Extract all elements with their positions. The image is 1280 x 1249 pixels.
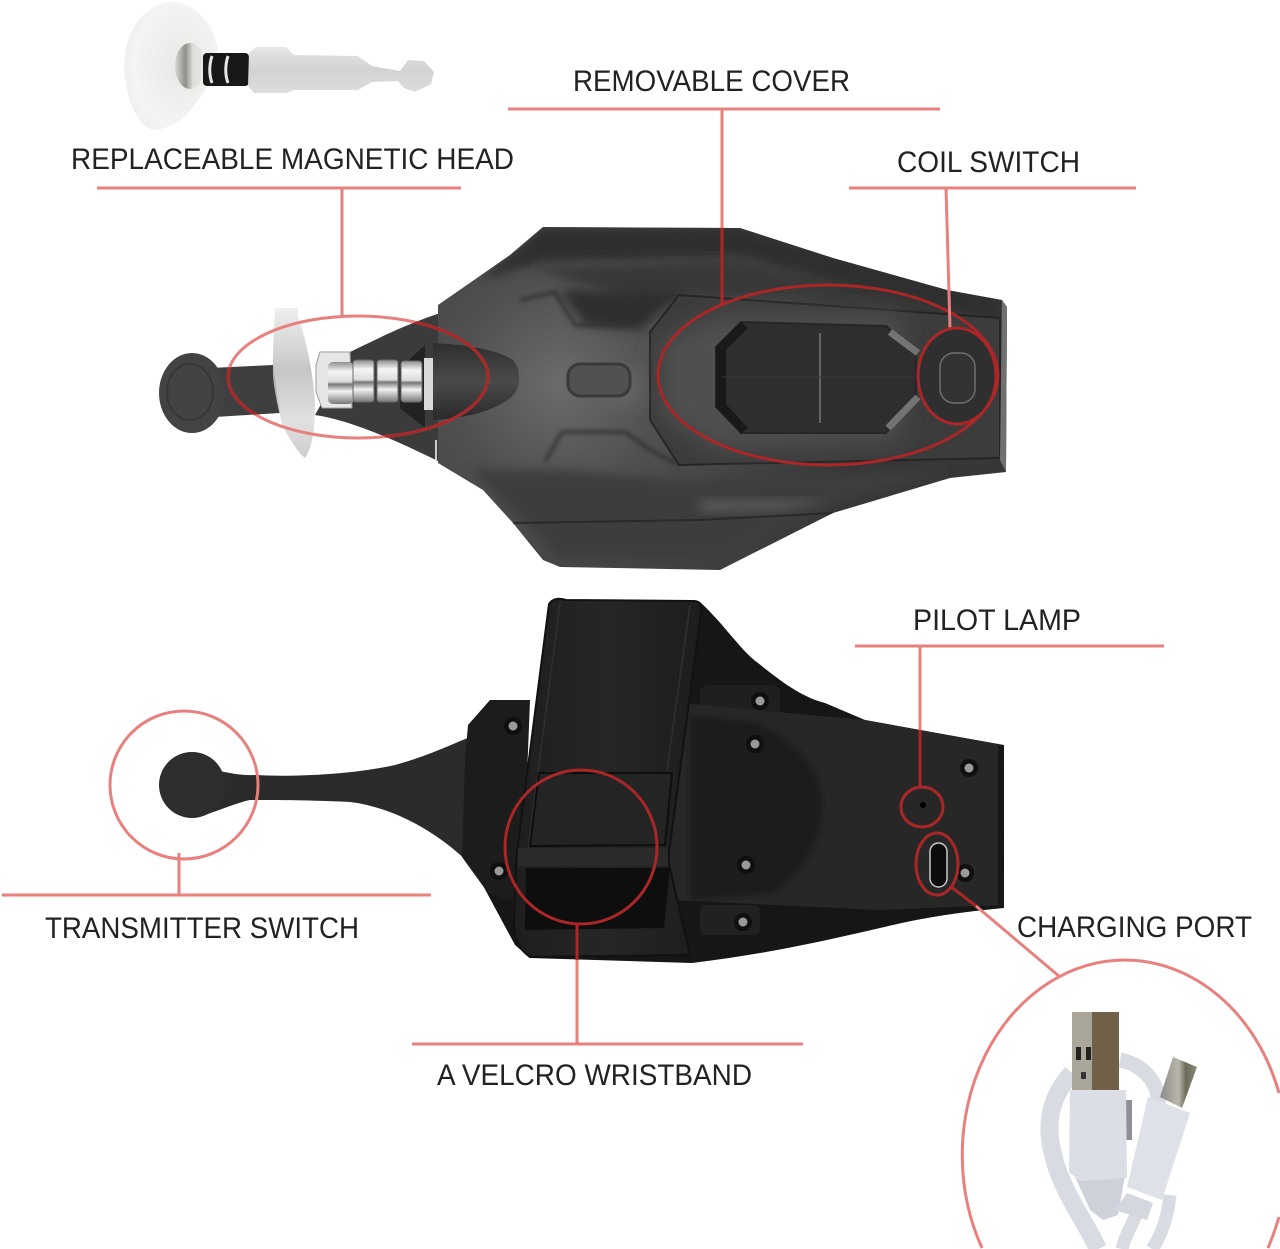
label: pilot lamp: PILOT LAMP — [913, 604, 1081, 637]
end cap edge — [1000, 300, 1007, 472]
callout: transmitter switch — [2, 711, 431, 895]
label: transmitter switch: TRANSMITTER SWITCH — [45, 912, 359, 945]
type-c port — [930, 843, 947, 887]
body shading — [470, 227, 1000, 560]
velcro flap — [530, 773, 672, 846]
lower device, back view — [159, 599, 1004, 963]
upper device, top view — [159, 227, 1007, 570]
front band — [514, 599, 701, 957]
suction cup — [124, 2, 218, 130]
rear mounts — [700, 685, 780, 715]
socket cylinder — [433, 343, 519, 420]
micro usb metal — [1160, 1057, 1197, 1108]
silver ring — [316, 352, 352, 408]
suction cup, side view — [273, 308, 315, 458]
rear strap — [480, 602, 1004, 963]
transmitter arm — [205, 735, 480, 875]
usb-a metal shell — [1072, 1012, 1119, 1090]
label: replaceable magnetic head: REPLACEABLE MAGNETIC HEAD — [71, 143, 514, 176]
transmitter knob — [159, 353, 225, 433]
transmitter stem — [210, 365, 280, 417]
cable loops and bundle — [1049, 1060, 1170, 1249]
center slot — [568, 364, 630, 396]
screws — [490, 692, 978, 931]
callout: charging port — [916, 833, 1279, 1248]
dark circular shade — [690, 715, 822, 900]
micro usb sleeve — [1127, 1097, 1190, 1200]
transmitter knob — [159, 752, 225, 818]
USB cable photo — [1049, 1012, 1197, 1249]
magnetic head product photo — [124, 2, 434, 130]
usb-a sleeve — [1069, 1090, 1127, 1181]
pilot lamp hole — [920, 802, 926, 808]
label: removable cover: REMOVABLE COVER — [573, 65, 850, 98]
main body plate — [670, 702, 1004, 910]
callout: removable cover — [508, 109, 998, 465]
left housing — [462, 700, 530, 905]
silver magnets — [353, 360, 422, 402]
dark wedge connector — [315, 313, 440, 462]
callout: replaceable magnetic head — [97, 188, 488, 438]
label: charging port: CHARGING PORT — [1017, 911, 1252, 944]
label: a velcro wristband: A VELCRO WRISTBAND — [437, 1059, 752, 1092]
cover panel — [650, 295, 1000, 465]
label: coil switch: COIL SWITCH — [897, 146, 1080, 179]
cover window — [716, 322, 916, 433]
coil switch button — [919, 329, 995, 423]
metal ring — [175, 43, 205, 89]
black magnets — [203, 53, 249, 86]
flap crossbar — [518, 848, 668, 866]
Y-shaped arms — [888, 332, 918, 428]
callout: pilot lamp — [855, 646, 1164, 827]
translucent sleeve and tip — [248, 47, 434, 93]
callout: velcro wristband — [412, 770, 803, 1044]
device body — [438, 227, 1007, 570]
velcro strip — [525, 868, 670, 930]
callout: coil switch — [849, 188, 1136, 424]
